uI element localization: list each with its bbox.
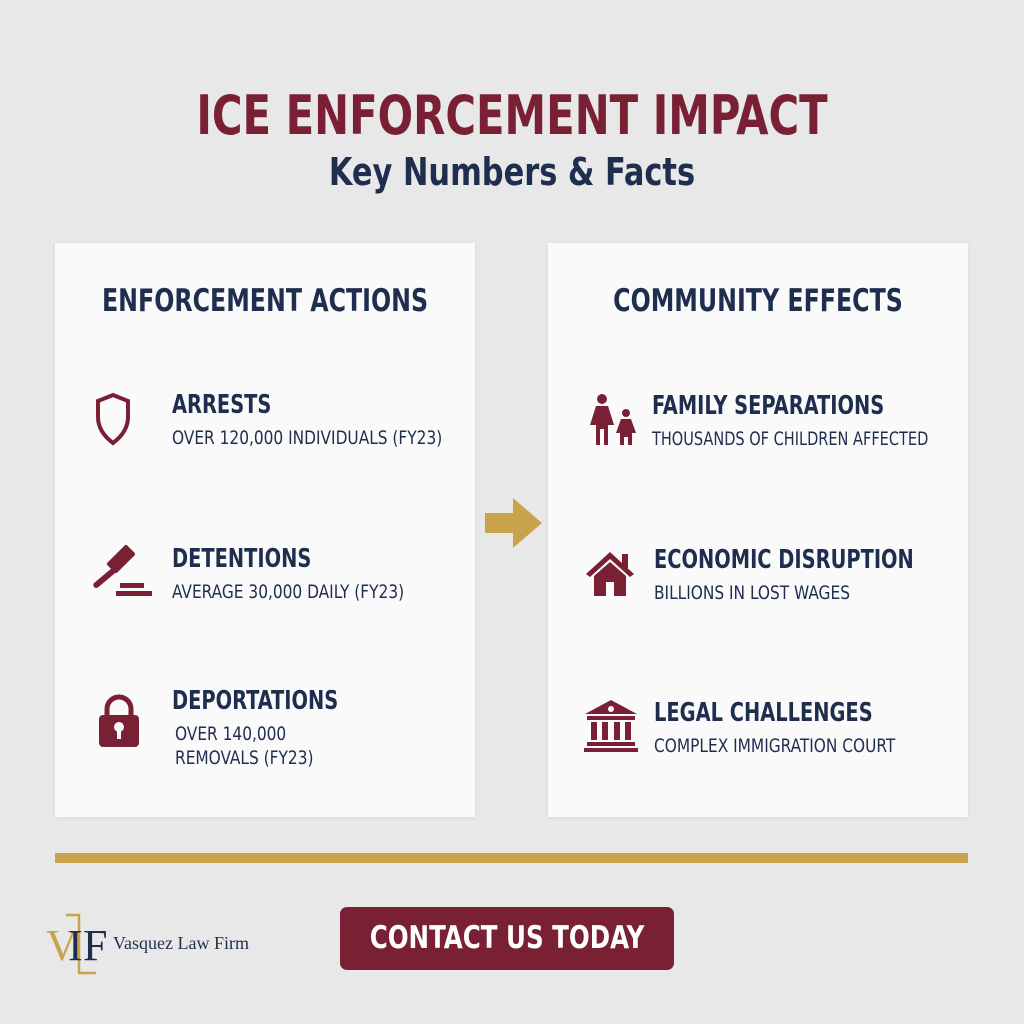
- icon: lock: [99, 694, 139, 747]
- item: detentions: [172, 544, 404, 603]
- icon: family: [590, 394, 636, 445]
- item: deportations: REMOVALS (FY23): [175, 747, 313, 769]
- logo: I: [68, 921, 83, 970]
- icon: courthouse: [584, 700, 638, 752]
- item: detentions: DETENTIONS: [172, 544, 311, 574]
- item: family separations: FAMILY SEPARATIONS: [652, 391, 884, 421]
- item: family separations: [652, 391, 928, 450]
- subtitle: Key Numbers & Facts: [329, 150, 695, 194]
- item: deportations: DEPORTATIONS: [172, 686, 338, 716]
- heading: community effects: COMMUNITY EFFECTS: [613, 283, 903, 319]
- item: detentions: AVERAGE 30,000 DAILY (FY23): [172, 581, 404, 603]
- logo: V: [46, 921, 78, 970]
- icon: house: [586, 552, 634, 596]
- item: deportations: [172, 686, 338, 769]
- panel: enforcement actions: [55, 243, 475, 817]
- icon: shield: [96, 392, 130, 446]
- logo: [46, 914, 249, 974]
- panel: community effects: [548, 243, 968, 817]
- logo: F: [83, 921, 107, 970]
- item: economic disruption: BILLIONS IN LOST WAGES: [654, 582, 850, 604]
- item: arrests: [172, 390, 442, 449]
- item: family separations: THOUSANDS OF CHILDREN AFFECTED: [652, 428, 928, 450]
- gold divider: [55, 853, 968, 863]
- item: deportations: OVER 140,000: [175, 723, 286, 745]
- logo: Vasquez Law Firm: [113, 933, 249, 953]
- icon: gavel: [93, 544, 152, 596]
- item: legal challenges: LEGAL CHALLENGES: [654, 698, 873, 728]
- heading: enforcement actions: ENFORCEMENT ACTIONS: [102, 283, 428, 319]
- button: contact us today: [340, 907, 674, 970]
- item: legal challenges: COMPLEX IMMIGRATION COURT: [654, 735, 895, 757]
- title: ICE ENFORCEMENT IMPACT: [196, 84, 828, 147]
- item: economic disruption: [654, 545, 914, 604]
- arrow: [485, 498, 542, 548]
- button: contact us today: CONTACT US TODAY: [370, 920, 644, 956]
- item: economic disruption: ECONOMIC DISRUPTION: [654, 545, 914, 575]
- item: legal challenges: [654, 698, 896, 757]
- item: arrests: ARRESTS: [172, 390, 271, 420]
- item: arrests: OVER 120,000 INDIVIDUALS (FY23): [172, 427, 442, 449]
